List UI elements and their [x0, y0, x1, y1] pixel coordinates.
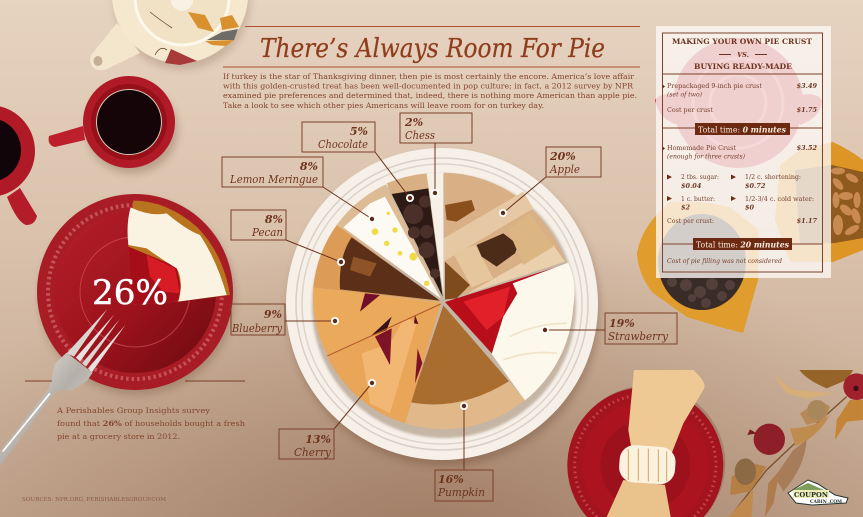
intro paragraph: [223, 72, 637, 110]
panel heading: BUYING READY-MADE: [694, 62, 792, 71]
rule under left plate: [25, 380, 245, 382]
homemade costs: $0.04: [681, 182, 702, 190]
label: strawberry: 19%: [609, 317, 635, 330]
label: lemon meringue: 8%: [300, 160, 318, 173]
label: cherry: Cherry: [294, 445, 331, 459]
label: blueberry: Blueberry: [231, 321, 282, 335]
homemade costs: $3.52: [797, 144, 817, 152]
ready-made costs: [662, 82, 817, 114]
pink pot behind panel: [655, 38, 822, 168]
grocery store survey text: [56, 406, 245, 441]
slice: pecan: [313, 225, 440, 302]
napkin ring: [618, 444, 677, 485]
chart markers: [331, 189, 549, 410]
label: blueberry: 9%: [264, 308, 282, 321]
teapot photo: [90, 0, 250, 70]
label: apple: 20%: [549, 150, 576, 163]
label: strawberry: Strawberry: [608, 329, 668, 343]
label: pumpkin: [435, 470, 493, 501]
ready-made costs: $1.75: [797, 106, 817, 114]
ready-made costs: Prepackaged 9-inch pie crust: [667, 82, 762, 90]
coupon cabin logo: COUPON: [794, 491, 828, 499]
homemade costs: [662, 144, 817, 225]
coupon cabin logo: [788, 480, 848, 505]
slice: pumpkin: [405, 305, 525, 429]
leader lines: [285, 143, 605, 470]
label: pecan: Pecan: [251, 225, 283, 239]
label: strawberry: [605, 313, 677, 344]
slice: blueberry: [313, 287, 442, 356]
coffee cup centre: [49, 76, 178, 174]
intro paragraph: If turkey is the star of Thanksgiving dinner, then pie is most certainly the encore. America’s love affair: [223, 72, 634, 81]
ready-made costs: Cost per crust: [667, 106, 713, 114]
homemade costs: 1 c. butter:: [681, 195, 715, 203]
ready-made costs: $3.49: [797, 82, 817, 90]
homemade costs: (enough for three crusts): [667, 152, 745, 160]
slice: cherry: [327, 304, 441, 423]
panel: crust comparison: [656, 26, 831, 278]
homemade costs: $0: [745, 204, 755, 212]
label: chocolate: [302, 122, 375, 152]
coffee cup left edge: [0, 105, 37, 225]
autumn leaves and pomegranates: [728, 370, 863, 517]
label: chess: [400, 113, 472, 143]
panel heading: VS.: [737, 51, 749, 59]
slice: apple: [444, 173, 565, 300]
pie slice on plate: [128, 201, 230, 305]
label: pecan: [231, 210, 286, 240]
homemade costs: Homemade Pie Crust: [667, 144, 736, 152]
slice: lemon meringue: [337, 184, 442, 298]
almond bowl: [775, 142, 863, 262]
intro paragraph: Take a look to see which other pies Americans will leave room for on turkey day.: [223, 101, 544, 110]
homemade costs: $0.72: [745, 182, 766, 190]
label: apple: [546, 147, 601, 177]
left plate with pie slice and 26 percent stat: [0, 194, 235, 466]
homemade costs: $1.17: [797, 217, 817, 225]
label: pumpkin: 16%: [438, 473, 464, 486]
homemade costs: Cost per crust:: [667, 217, 714, 225]
red plate with napkin: [567, 370, 725, 517]
26 percent: 26%: [92, 273, 168, 313]
title: [223, 26, 640, 67]
ready-made costs: (set of two): [667, 90, 702, 98]
label: chocolate: 5%: [350, 125, 368, 138]
coupon cabin logo: CABIN .COM: [810, 499, 842, 505]
total time 0 minutes: Total time: 0 minutes: [698, 124, 786, 134]
label: pumpkin: Pumpkin: [437, 485, 485, 499]
label: cherry: 13%: [305, 433, 331, 446]
grocery store survey text: pie at a grocery store in 2012.: [57, 432, 180, 441]
fork: [0, 309, 126, 466]
panel footnote: Cost of pie filling was not considered: [667, 257, 782, 265]
white pie plate: [286, 148, 600, 466]
label: chess: 2%: [404, 116, 423, 129]
homemade costs: 1/2 c. shortening:: [745, 173, 801, 181]
label: cherry: [279, 429, 334, 459]
chocolate chip bowl: [637, 202, 759, 333]
slice: chess: [427, 173, 444, 297]
homemade costs: 2 tbs. sugar:: [681, 173, 719, 181]
label: apple: Apple: [549, 162, 580, 176]
napkin: [628, 370, 705, 453]
slice: chocolate: [387, 173, 443, 297]
label: lemon meringue: Lemon Meringue: [229, 172, 318, 186]
intro paragraph: examined pie preferences and determined that, indeed, there is nothing more American than apple pie.: [223, 91, 637, 100]
pinecone: [735, 458, 756, 485]
title: There’s Always Room For Pie: [260, 33, 605, 64]
label: chocolate: Chocolate: [318, 137, 368, 151]
sources: SOURCES: NPR.ORG, PERISHABLESGROUP.COM: [22, 497, 166, 503]
intro paragraph: with this golden-crusted treat has been well-documented in pop culture; in fact, a 2012 survey by NPR: [223, 82, 633, 90]
homemade costs: 1/2-3/4 c. cold water:: [745, 195, 814, 203]
slice: strawberry: [445, 263, 575, 401]
label: blueberry: [231, 304, 285, 335]
label: chess: Chess: [405, 128, 435, 142]
panel heading: MAKING YOUR OWN PIE CRUST: [672, 37, 812, 46]
grocery store survey text: found that 26% of households bought a fresh: [57, 419, 245, 428]
label: pecan: 8%: [265, 213, 283, 226]
total time 20 minutes: Total time: 20 minutes: [696, 240, 789, 250]
homemade costs: $2: [681, 204, 691, 212]
pomegranate: [747, 373, 863, 455]
panel heading: [672, 37, 812, 71]
grocery store survey text: A Perishables Group Insights survey: [56, 406, 211, 415]
label: lemon meringue: [222, 157, 323, 187]
pie chart of slices: [313, 173, 575, 429]
